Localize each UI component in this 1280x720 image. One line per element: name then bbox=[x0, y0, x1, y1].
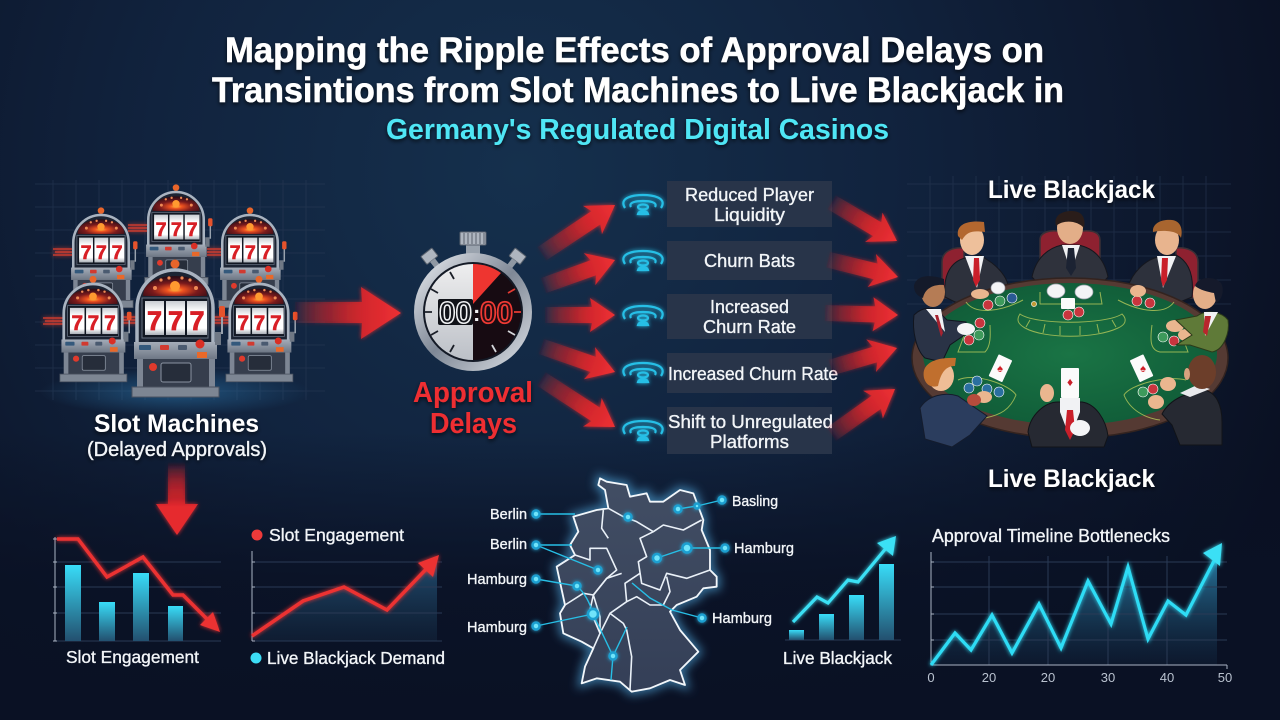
cards bbox=[989, 298, 1153, 398]
chart: live blackjack growth bbox=[783, 536, 901, 668]
betting markings bbox=[958, 292, 1188, 420]
map connectors bbox=[536, 500, 725, 680]
map nodes bbox=[532, 496, 728, 660]
player: front centre bbox=[1028, 384, 1108, 447]
effect box: shift to unregulated platforms: Platforms bbox=[710, 431, 789, 452]
slot machine back left bbox=[70, 207, 138, 308]
player: left bbox=[913, 276, 975, 362]
slot machine back left: 777 bbox=[81, 242, 123, 264]
label: slot machines: Slot Machines bbox=[94, 410, 259, 438]
slot machine front centre bbox=[132, 260, 225, 397]
slot machine back centre bbox=[145, 184, 212, 285]
slot machine front centre: 777 bbox=[147, 306, 205, 336]
arrow: slots to delays bbox=[295, 287, 401, 339]
effect box: reduced player liquidity: Liquidity bbox=[714, 204, 786, 225]
effect box: increased churn rate: Increased bbox=[710, 296, 789, 317]
slot machine front left: 777 bbox=[71, 312, 116, 335]
title: Germany's Regulated Digital Casinos bbox=[386, 114, 889, 146]
player hands bbox=[971, 285, 1194, 341]
effect box: increased churn rate: Churn Rate bbox=[703, 316, 796, 337]
growth trend line bbox=[793, 536, 896, 622]
effect box: shift to unregulated platforms bbox=[667, 407, 833, 454]
title: Mapping the Ripple Effects of Approval Delays on bbox=[225, 31, 1044, 70]
cards: ♦ bbox=[1067, 375, 1073, 389]
player: dealer bbox=[1032, 211, 1108, 292]
chairs bbox=[942, 231, 1198, 298]
map labels: Hamburg bbox=[467, 571, 527, 588]
slot machine front right: 777 bbox=[237, 312, 282, 335]
cards: ♠ bbox=[997, 363, 1003, 375]
digital time bbox=[438, 295, 513, 330]
cards: ♠ bbox=[1140, 363, 1146, 375]
chart: slot engagement bars bbox=[53, 537, 221, 667]
map labels: Hamburg bbox=[712, 610, 772, 627]
slot machine back right: 777 bbox=[230, 242, 272, 264]
icons: signal bbox=[623, 195, 663, 440]
dealer gloves bbox=[991, 282, 1093, 299]
axis ticks: 0 bbox=[927, 670, 935, 685]
map labels: Basling bbox=[732, 493, 778, 510]
player: back left bbox=[945, 222, 1008, 302]
label: approval delays: Delays bbox=[430, 408, 517, 440]
slot machine front right bbox=[226, 276, 298, 382]
axis ticks: 50 bbox=[1218, 670, 1232, 685]
heading: live blackjack bottom: Live Blackjack bbox=[988, 465, 1155, 493]
axis ticks: 30 bbox=[1101, 670, 1115, 685]
player: front right bbox=[1148, 355, 1222, 445]
chart: slot vs live blackjack demand bbox=[250, 525, 445, 668]
effect box: churn bats: Churn Bats bbox=[704, 250, 795, 271]
arrows: delays to effects bbox=[532, 191, 624, 441]
slot machine front left bbox=[60, 276, 132, 382]
effect box: churn bats bbox=[667, 241, 832, 280]
rising trend line bbox=[252, 555, 439, 636]
label: Live Blackjack bbox=[783, 648, 892, 668]
axis ticks: 20 bbox=[982, 670, 996, 685]
digital time: : bbox=[473, 301, 480, 326]
title: Transintions from Slot Machines to Live Blackjack in bbox=[212, 71, 1064, 110]
arrow: slots down to charts bbox=[156, 462, 198, 535]
player: back right bbox=[1128, 220, 1192, 302]
table rim bbox=[912, 278, 1228, 438]
map labels: Berlin bbox=[490, 536, 527, 553]
label: slot machines bbox=[87, 410, 267, 461]
slot machine back right bbox=[219, 207, 286, 308]
map labels: Berlin bbox=[490, 506, 527, 523]
map labels: Hamburg bbox=[467, 619, 527, 636]
player: front left bbox=[920, 358, 992, 447]
heading: live blackjack top: Live Blackjack bbox=[988, 176, 1155, 204]
map labels: Hamburg bbox=[734, 540, 794, 557]
chart title: Approval Timeline Bottlenecks bbox=[932, 526, 1170, 546]
effect box: reduced player liquidity: Reduced Player bbox=[685, 184, 814, 205]
axis ticks: 20 bbox=[1041, 670, 1055, 685]
label: Slot Engagement bbox=[66, 647, 199, 667]
timeline line bbox=[931, 543, 1222, 665]
effect box: shift to unregulated platforms: Shift to Unregulated bbox=[668, 411, 833, 432]
label: slot machines: (Delayed Approvals) bbox=[87, 439, 267, 461]
effect box: reduced player liquidity bbox=[667, 181, 832, 227]
chips bbox=[964, 293, 1179, 397]
panel: slot machines bbox=[35, 180, 325, 461]
panel: live blackjack table bbox=[907, 176, 1231, 493]
icon: stopwatch bbox=[414, 232, 532, 371]
map: germany bbox=[467, 478, 794, 692]
effect box: increased churn rate bbox=[667, 294, 832, 339]
digital time: 00 bbox=[439, 295, 472, 330]
slot machine back centre: 777 bbox=[156, 219, 198, 241]
chart: approval timeline bottlenecks bbox=[927, 526, 1232, 685]
digital time: 00 bbox=[480, 295, 513, 330]
legend: slot engagement: Slot Engagement bbox=[269, 525, 404, 545]
map labels bbox=[467, 493, 794, 636]
title bbox=[212, 31, 1064, 146]
legend: live blackjack demand: Live Blackjack Demand bbox=[267, 648, 445, 668]
arrows: effects to blackjack bbox=[822, 188, 906, 448]
label: approval delays: Approval bbox=[413, 377, 533, 409]
table felt bbox=[923, 283, 1217, 425]
player: right bbox=[1176, 278, 1228, 352]
axis ticks: 40 bbox=[1160, 670, 1174, 685]
falling trend line bbox=[57, 539, 220, 632]
effect box: increased churn rate single line bbox=[667, 353, 838, 393]
label: approval delays bbox=[413, 377, 533, 440]
axis ticks bbox=[927, 670, 1232, 685]
effect box: increased churn rate single line: Increased Churn Rate bbox=[668, 363, 838, 384]
motion streaks bbox=[43, 225, 230, 324]
